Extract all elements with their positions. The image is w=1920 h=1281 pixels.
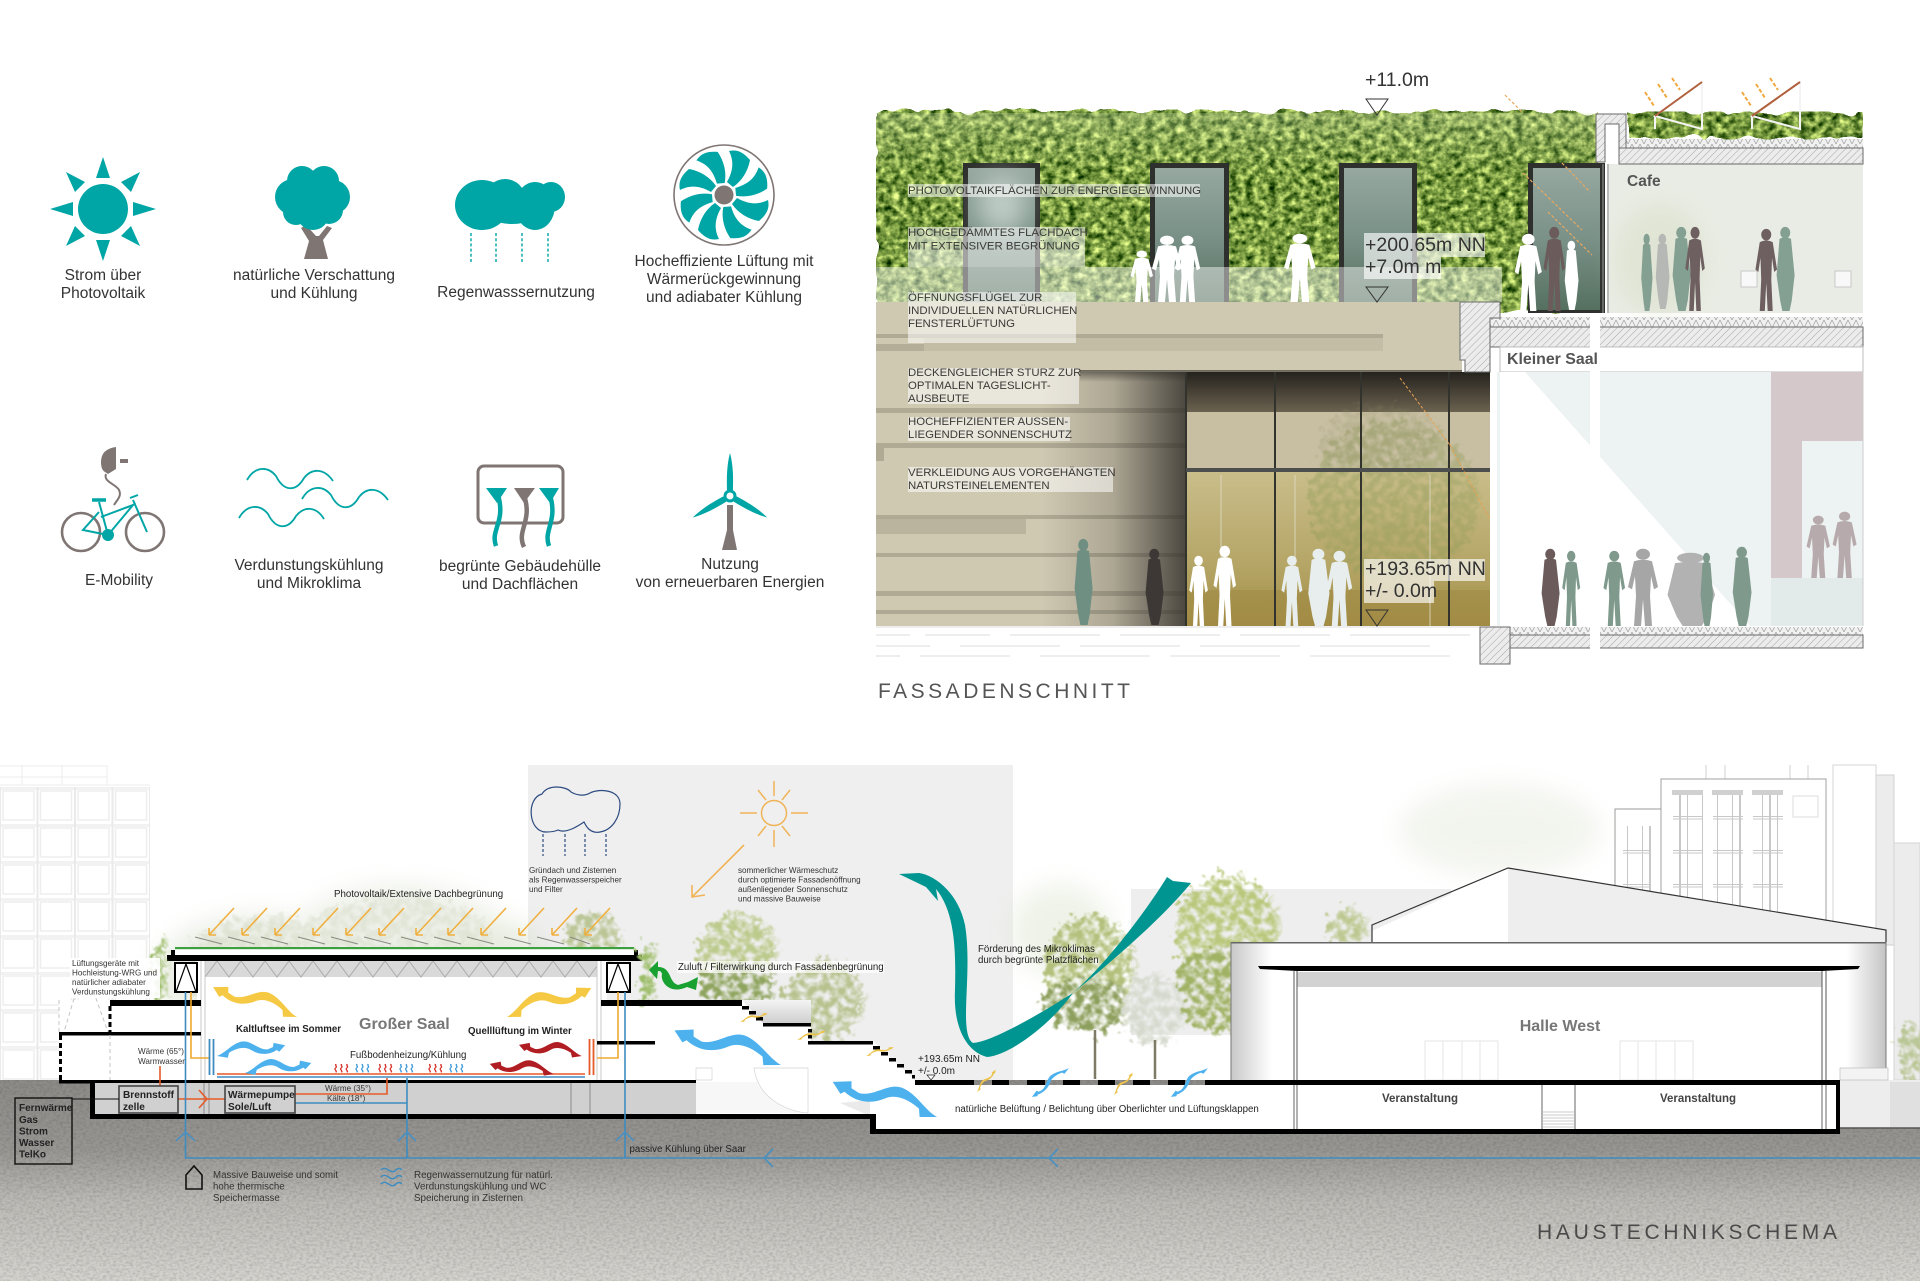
heat pump units: Brennstoff <box>123 1090 175 1101</box>
label: natürliche Verschattung und Kühlung: natürliche Verschattung <box>233 267 395 284</box>
heat pump units <box>119 1086 295 1113</box>
callout: insulated flat roof: HOCHGEDÄMMTES FLACHDACH <box>908 227 1088 239</box>
callout: sun protection: HOCHEFFIZIENTER AUSSEN- <box>908 416 1068 428</box>
level mark: +11.0m <box>1365 69 1429 115</box>
heading: Fassadenschnitt: FASSADENSCHNITT <box>878 680 1130 703</box>
icon: sun outline <box>740 781 808 847</box>
icon: sun <box>50 157 156 261</box>
translucent balcony glazing <box>876 267 1502 302</box>
text: summer heat protection: durch optimierte Fassadenöffnung <box>738 876 861 884</box>
label: Quelllüftung im Winter: Quelllüftung im Winter <box>468 1026 572 1037</box>
background buildings right <box>1615 765 1920 1080</box>
green living wall <box>876 111 1598 311</box>
pavement <box>876 627 1480 656</box>
gable of Halle West <box>1372 868 1886 942</box>
terrace white mass <box>597 1000 915 1129</box>
label: Regenwasssernutzung: Regenwasssernutzung <box>437 284 595 301</box>
silhouettes: people <box>1075 227 1857 626</box>
label: level +193.65m <box>918 1054 980 1080</box>
pipe: floor cooling <box>217 1076 585 1078</box>
kleiner saal interior <box>1497 347 1863 626</box>
level mark: +200.65m NN <box>1364 233 1486 302</box>
icon: house thermal mass <box>186 1166 202 1189</box>
microclimate swoosh <box>899 873 1191 1057</box>
background buildings left <box>0 765 150 1080</box>
auditorium floor curve <box>696 1068 913 1127</box>
grey background block <box>1131 889 1451 1035</box>
utility box: Fernwärme <box>19 1103 73 1114</box>
label: passive cooling: passive Kühlung über Saar <box>630 1144 747 1155</box>
heat pump units: Wärmepumpe <box>228 1090 295 1101</box>
text: ventilation units: Lüftungsgeräte mit <box>72 959 140 968</box>
utility box: Strom <box>19 1126 48 1138</box>
green climbers <box>155 940 656 1000</box>
panel: building services section <box>0 765 1920 1281</box>
text: rainwater use: Verdunstungskühlung und WC <box>414 1182 546 1192</box>
Halle West building: Halle West <box>1520 1018 1601 1035</box>
text: summer heat protection: und massive Bauweise <box>738 894 821 904</box>
heat pump units: Sole/Luft <box>228 1102 272 1113</box>
label: Nutzung von erneuerbaren Energien: Nutzung <box>701 556 759 573</box>
callout: insulated flat roof: MIT EXTENSIVER BEGRÜNUNG <box>908 240 1080 252</box>
label: microclimate: Förderung des Mikroklimas <box>978 944 1095 955</box>
ground floor glazing <box>1186 372 1490 626</box>
label: Wärme 65 Warmwasser: Wärme (65°) <box>138 1047 184 1056</box>
label: Verdunstungskühlung und Mikroklima: Verdunstungskühlung <box>234 557 384 574</box>
orange chevron <box>199 1090 207 1108</box>
annotations on the facade <box>908 184 1201 492</box>
icon: rain cloud outline <box>531 787 620 856</box>
air flow arrows <box>211 975 942 1125</box>
window frames <box>963 163 1605 313</box>
label: natural ventilation: natürliche Belüftung / Belichtung über Oberlichter und Lüftungsklappen <box>955 1104 1259 1115</box>
label: Strom über Photovoltaik: Strom über <box>65 267 141 284</box>
icon: wind turbine <box>691 453 769 550</box>
icon: ventilation fan <box>674 145 774 245</box>
utility box: Gas <box>19 1115 38 1126</box>
callout: stone cladding: VERKLEIDUNG AUS VORGEHÄNGTEN <box>908 467 1116 479</box>
heading: Haustechnikschema: HAUSTECHNIKSCHEMA <box>1537 1221 1837 1244</box>
grey box behind stairs <box>742 1000 811 1023</box>
icon: green building envelope <box>478 466 563 547</box>
label: E-Mobility: E-Mobility <box>85 572 153 589</box>
solar ray arrows on window <box>1505 95 1592 255</box>
light leaves on top of wall <box>876 113 1598 173</box>
level mark: +193.65m NN: +193.65m NN <box>1365 558 1486 580</box>
utility box <box>15 1098 119 1164</box>
roof greenery <box>1627 113 1863 138</box>
text: thermal mass: hohe thermische <box>213 1182 285 1192</box>
right entrance block <box>1840 1068 1920 1128</box>
red pipes <box>160 1066 387 1099</box>
green air supply arrow <box>649 961 698 990</box>
structure in black <box>59 1000 1840 1086</box>
text: ventilation units: Hochleistung-WRG und <box>72 968 157 978</box>
label: begrünte Gebäudehülle und Dachflächen: und Dachflächen <box>462 576 578 593</box>
heating and cooling squiggles <box>335 1064 463 1072</box>
sun ray arrow <box>692 845 744 897</box>
label: Wärme 35: Wärme (35°) <box>325 1084 371 1093</box>
text: rainwater use: Speicherung in Zisternen <box>414 1193 523 1204</box>
heat pump units: zelle <box>123 1102 145 1113</box>
Halle West building <box>1231 942 1886 1080</box>
icon: tree <box>275 166 350 259</box>
callout: lintel: AUSBEUTE <box>908 393 970 405</box>
basement: Veranstaltung <box>1382 1093 1458 1105</box>
basement <box>90 1083 1840 1134</box>
soil <box>0 1080 1920 1281</box>
radiator bars <box>210 1039 594 1075</box>
label: Kälte 18: Kälte (18°) <box>327 1094 366 1103</box>
text: thermal mass: Massive Bauweise und somit <box>213 1170 338 1181</box>
annex ghost lines <box>59 965 110 1080</box>
background trees <box>155 785 1920 1079</box>
label: Cafe: Cafe <box>1627 173 1661 190</box>
utility box: TelKo <box>19 1150 46 1160</box>
level mark: +200.65m NN: +200.65m NN <box>1365 234 1486 256</box>
label: Großer Saal: Großer Saal <box>359 1016 450 1033</box>
text: thermal mass: Speichermasse <box>213 1193 280 1204</box>
label: Kaltluftsee im Sommer: Kaltluftsee im Sommer <box>236 1024 341 1035</box>
text: rainwater storage: und Filter <box>529 885 563 894</box>
photovoltaic panels on roof <box>1645 78 1800 129</box>
label: Wärme 65 Warmwasser: Warmwasser <box>138 1057 185 1066</box>
text: summer heat protection: außenliegender Sonnenschutz <box>738 885 848 894</box>
right section: cafe interior <box>1603 164 1863 315</box>
label: natürliche Verschattung und Kühlung: und Kühlung <box>270 285 358 302</box>
panel: sustainability icons <box>50 145 824 593</box>
callout: opening casements: ÖFFNUNGSFLÜGEL ZUR <box>908 292 1042 304</box>
flow chevrons <box>176 1132 1058 1167</box>
callout: photovoltaic surfaces: PHOTOVOLTAIKFLÄCHEN ZUR ENERGIEGEWINNUNG <box>908 185 1201 197</box>
callout: lintel: OPTIMALEN TAGESLICHT- <box>908 380 1051 392</box>
basement: Veranstaltung <box>1660 1093 1736 1105</box>
dashed annex wall <box>60 1006 110 1080</box>
label: Nutzung von erneuerbaren Energien: von erneuerbaren Energien <box>636 574 824 591</box>
icon: water waves <box>381 1168 402 1186</box>
panel: facade section <box>868 69 1863 703</box>
text: ventilation units <box>70 958 160 998</box>
text: summer heat protection: sommerlicher Wärmeschutz <box>738 866 838 875</box>
icon: rain cloud <box>455 179 565 262</box>
label: Hocheffiziente Lüftung: und adiabater Kühlung <box>646 289 802 306</box>
pipe: floor heating <box>217 1073 585 1075</box>
main hall <box>59 940 656 1080</box>
small air arrows at stairs and skylights <box>739 1010 1210 1099</box>
text: ventilation units: natürlicher adiabater <box>72 978 146 987</box>
text: ventilation units: Verdunstungskühlung <box>72 988 150 996</box>
text: rainwater use: Regenwassernutzung für natürl. <box>414 1170 553 1181</box>
label: level +193.65m: +193.65m NN <box>918 1054 980 1065</box>
callout: opening casements: FENSTERLÜFTUNG <box>908 318 1015 330</box>
level mark: +200.65m NN: +7.0m m <box>1365 256 1441 278</box>
blue water pipes <box>186 992 1920 1158</box>
icon: e-bike <box>62 447 164 551</box>
photovoltaic arrows and panels <box>195 908 610 944</box>
roof build-up and slabs <box>1460 114 1863 664</box>
label: level +193.65m: +/- 0.0m <box>918 1066 955 1077</box>
utility box: Wasser <box>19 1138 54 1149</box>
label: Strom über Photovoltaik: Photovoltaik <box>61 285 145 302</box>
break line through building <box>1590 313 1600 650</box>
text: air supply: Zuluft / Filterwirkung durch Fassadenbegrünung <box>678 962 884 973</box>
callout: lintel: DECKENGLEICHER STURZ ZUR <box>908 367 1081 379</box>
label: microclimate: durch begrünte Platzflächen <box>978 955 1099 966</box>
label: Verdunstungskühlung und Mikroklima: und Mikroklima <box>257 575 361 592</box>
level mark: +193.65m NN: +/- 0.0m <box>1365 580 1437 602</box>
warm pipes <box>191 992 618 1058</box>
callout: sun protection: LIEGENDER SONNENSCHUTZ <box>908 429 1072 441</box>
natural stone cladding <box>876 302 1462 626</box>
label: Hocheffiziente Lüftung: Hocheffiziente Lüftung mit <box>635 253 814 270</box>
callout: stone cladding: NATURSTEINELEMENTEN <box>908 480 1050 492</box>
text: rainwater storage: als Regenwasserspeicher <box>529 876 622 884</box>
level mark: +11.0m: +11.0m <box>1365 69 1429 91</box>
callout: opening casements: INDIVIDUELLEN NATÜRLICHEN <box>908 305 1077 317</box>
icon: evaporation waves <box>239 469 388 526</box>
text: rainwater storage: Gründach und Zisternen <box>529 866 616 875</box>
label: begrünte Gebäudehülle und Dachflächen: begrünte Gebäudehülle <box>439 558 601 575</box>
label: Hocheffiziente Lüftung: Wärmerückgewinnung <box>647 271 801 288</box>
label: Fußbodenheizung/Kühlung: Fußbodenheizung/Kühlung <box>350 1050 466 1061</box>
label: Kleiner Saal: Kleiner Saal <box>1507 351 1598 368</box>
grey info panel <box>528 765 1013 1085</box>
text: photovoltaic roof: Photovoltaik/Extensive Dachbegrünung <box>334 889 503 900</box>
clean edge under wall <box>868 100 876 320</box>
level mark: +193.65m NN <box>1364 558 1486 626</box>
